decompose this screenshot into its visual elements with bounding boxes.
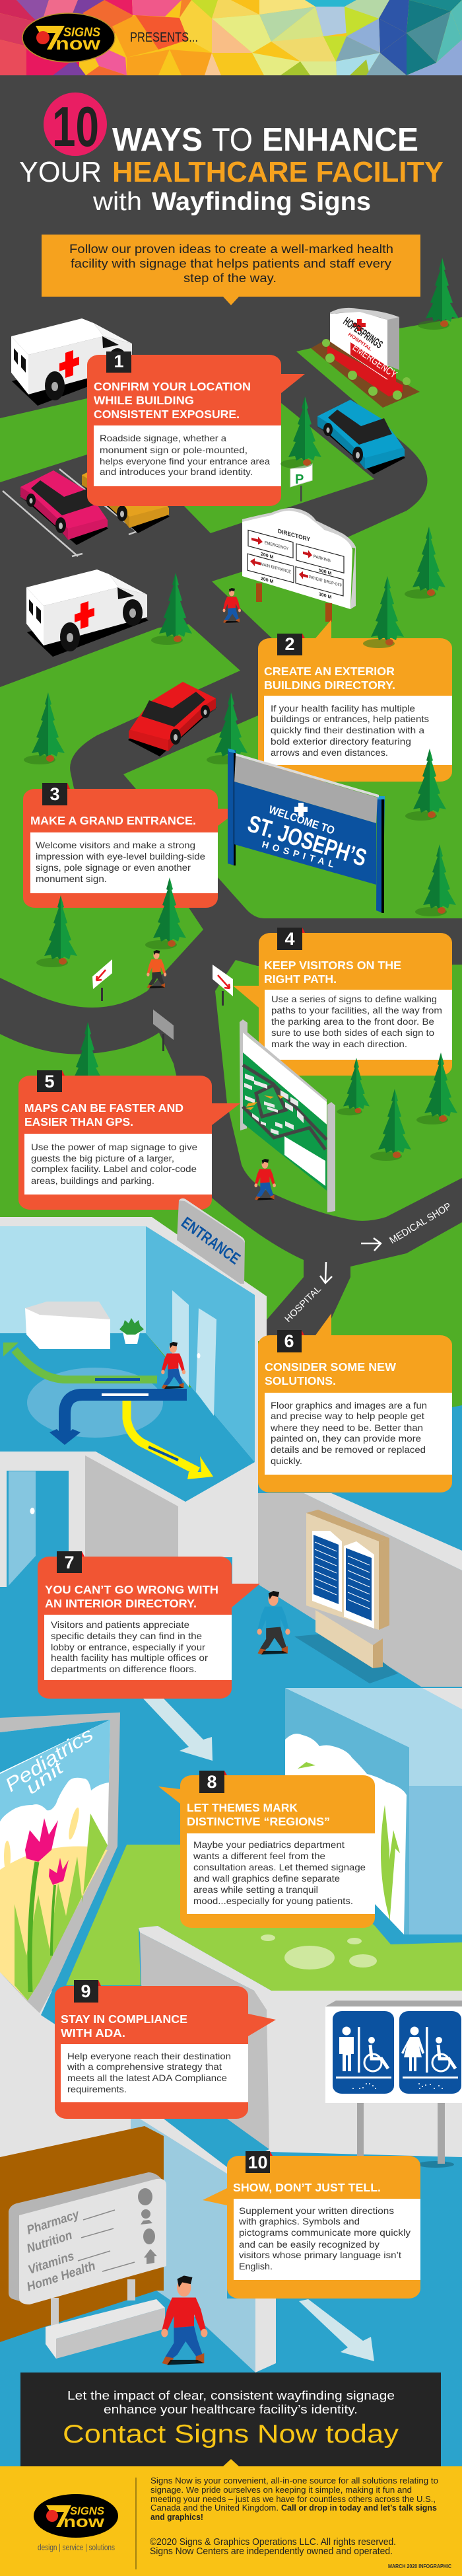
ambulance lower xyxy=(26,570,148,657)
text panel 4: sure to use both sides of each sign to xyxy=(271,1027,434,1038)
map sign xyxy=(240,1019,335,1212)
heading 1: CONSISTENT EXPOSURE. xyxy=(94,408,240,421)
heading 2 xyxy=(264,665,395,692)
pediatrics wall mural: unit xyxy=(22,1757,69,1798)
text panel 2: If your health facility has multiple xyxy=(271,703,415,714)
text panel 4: Use a series of signs to define walking xyxy=(271,994,437,1004)
white planter base xyxy=(46,2299,165,2359)
text panel 3: impression with eye-level building-side xyxy=(36,851,205,862)
text panel 4: mark the way in each direction. xyxy=(271,1039,407,1049)
text panel 7: health facility has multiple offices or xyxy=(51,1652,208,1663)
text panel 10: Supplement your written directions xyxy=(239,2205,394,2216)
text panel 2 xyxy=(264,696,452,765)
number 5: 5 xyxy=(44,1072,55,1091)
person on floor graphics xyxy=(161,1342,185,1389)
callout 5 xyxy=(18,1070,240,1210)
sign: St. Joseph's Hospital: WELCOME TO xyxy=(267,803,336,837)
text panel 8: consultation areas. Let themed signage xyxy=(193,1862,366,1872)
heading 4: RIGHT PATH. xyxy=(264,973,337,986)
road lettering: hospital: HOSPITAL xyxy=(282,1283,323,1324)
heading 7: AN INTERIOR DIRECTORY. xyxy=(45,1597,197,1610)
title: TO xyxy=(212,122,253,158)
text panel 7 xyxy=(44,1615,232,1680)
intro box: facility with signage that helps patients and staff every xyxy=(71,257,391,270)
copyright: Signs Now Centers are independently owned and operated. xyxy=(150,2546,393,2557)
monument sign: Hopesprings Hospital: HOPESPRINGS xyxy=(341,315,385,351)
small direction signs xyxy=(92,959,233,1051)
grass: left lawn xyxy=(0,624,240,1008)
interior blue floor base xyxy=(0,1387,462,2466)
presents label: PRESENTS... xyxy=(130,30,198,45)
exterior directory sign: 200 M xyxy=(261,552,273,560)
text panel 2: quickly find their destination with a xyxy=(271,725,424,735)
text panel 9: requirements. xyxy=(67,2084,127,2094)
heading 1 xyxy=(94,380,251,421)
entrance sign: ENTRANCE xyxy=(178,1214,244,1268)
text panel 8: mood...especially for young patients. xyxy=(193,1895,353,1906)
text panel 7: departments on difference floors. xyxy=(51,1664,197,1674)
text panel 1: monument sign or pole-mounted, xyxy=(100,445,248,455)
intro box xyxy=(42,235,420,305)
about text: meeting your needs – just as we have for countless others across the U.S., xyxy=(150,2494,436,2504)
call to action bar: enhance your healthcare facility’s identity. xyxy=(104,2403,358,2416)
grass: lower left lawn xyxy=(0,1033,304,1387)
number 4 xyxy=(277,928,305,950)
text panel 8: Maybe your pediatrics department xyxy=(193,1839,345,1850)
exterior directory sign xyxy=(242,508,356,622)
call to action bar: Let the impact of clear, consistent wayfinding signage xyxy=(67,2389,395,2402)
exterior directory sign: PATIENT DROP-OFF xyxy=(309,575,342,588)
callout 2 xyxy=(258,620,452,782)
text panel 6: quickly. xyxy=(271,1455,302,1466)
text panel 7: specific details they can find in the xyxy=(51,1631,202,1641)
grass: right side lawn xyxy=(123,317,462,918)
heading 2: BUILDING DIRECTORY. xyxy=(264,679,395,692)
text panel 2: bold exterior directory featuring xyxy=(271,736,411,747)
exterior directory sign: 300 M xyxy=(319,591,331,600)
person walking near directory xyxy=(223,588,241,623)
about text: Canada and the United Kingdom. xyxy=(150,2503,279,2513)
callout 3 xyxy=(23,783,241,908)
number 6 xyxy=(277,1330,304,1352)
pediatrics wall mural: Pediatrics xyxy=(1,1724,97,1796)
text panel 8: areas while setting a tranquil xyxy=(193,1884,318,1895)
trees across the grounds xyxy=(24,258,459,1161)
title: 10 xyxy=(52,96,99,159)
intro box: Follow our proven ideas to create a well-marked health xyxy=(69,242,393,256)
red car xyxy=(128,682,216,756)
number 6: 6 xyxy=(284,1331,294,1351)
corridor right wall xyxy=(258,1493,462,1687)
title: WAYS xyxy=(112,122,203,158)
monument sign: Hopesprings Hospital xyxy=(311,308,420,408)
lobby floor xyxy=(0,1333,250,1502)
floor arrow toward callout 8 xyxy=(143,1699,213,1761)
text panel 10: with graphics. Symbols and xyxy=(238,2216,360,2226)
footer logo: SIGNS xyxy=(70,2505,105,2517)
callout 10 xyxy=(203,2151,420,2299)
title: HEALTHCARE FACILITY xyxy=(112,156,444,188)
callout 1 xyxy=(87,351,305,506)
reception desk xyxy=(25,1302,110,1349)
text panel 1: and introduces your brand identity. xyxy=(100,466,253,477)
floor graphic: blue arrow xyxy=(50,1395,187,1445)
heading 9 xyxy=(61,2012,187,2040)
sign: St. Joseph's Hospital: ST. JOSEPH’S xyxy=(245,809,370,871)
road lettering: medical shop: MEDICAL SHOP xyxy=(387,1200,453,1246)
text panel 6: and precise way to help people get xyxy=(271,1411,424,1421)
blue car xyxy=(317,400,405,474)
text panel 9: meets all the latest ADA Compliance xyxy=(67,2073,227,2083)
heading 4: KEEP VISITORS ON THE xyxy=(264,959,401,972)
text panel 5 xyxy=(24,1134,212,1195)
road lettering: hospital xyxy=(282,1262,332,1324)
text panel 10 xyxy=(234,2199,420,2280)
number 7 xyxy=(57,1551,84,1573)
heading 1: WHILE BUILDING xyxy=(94,394,194,407)
text panel 8: and wall graphics define separate xyxy=(193,1873,340,1884)
parking sign: P xyxy=(295,472,304,487)
number 1: 1 xyxy=(114,351,124,371)
number 8: 8 xyxy=(207,1772,217,1792)
text panel 9 xyxy=(61,2044,248,2102)
green themed floor xyxy=(63,1845,462,1991)
exterior directory sign: 500 M xyxy=(319,568,331,576)
text panel 10: and can be easily recognized by xyxy=(239,2239,380,2250)
about text: signage. We pride ourselves on keeping it simple, making it fun and xyxy=(150,2485,412,2495)
heading 4 xyxy=(264,959,401,986)
tagline: design | service | solutions xyxy=(38,2542,115,2552)
heading 8: LET THEMES MARK xyxy=(187,1801,298,1814)
title: Wayfinding Signs xyxy=(152,188,371,216)
road and dark background xyxy=(0,75,462,1390)
exterior directory sign: MAIN ENTRANCE xyxy=(261,562,291,575)
text panel 3: signs, pole signage or even another xyxy=(36,862,191,873)
text panel 8: wants a different feel from the xyxy=(193,1851,325,1861)
text panel 4: the parking area to the front door. Be xyxy=(271,1016,434,1027)
corridor walls with door xyxy=(0,1452,258,1607)
heading 6 xyxy=(265,1360,396,1387)
callout 6 xyxy=(258,1313,452,1492)
number 9 xyxy=(74,1980,101,2003)
text panel 2: arrows and even distances. xyxy=(271,747,388,758)
logo: Signs Now: SIGNS xyxy=(63,26,100,40)
exterior directory sign: PARKING xyxy=(314,554,331,564)
intro box: step of the way. xyxy=(183,272,277,285)
heading 5: EASIER THAN GPS. xyxy=(24,1115,133,1128)
text panel 8 xyxy=(187,1833,375,1914)
heading 1: CONFIRM YOUR LOCATION xyxy=(94,380,251,393)
text panel 6: where they need to be. Better than xyxy=(270,1422,423,1433)
heading 9: WITH ADA. xyxy=(61,2026,125,2040)
large walking person xyxy=(161,2275,207,2365)
brown wall with directional sign: Vitamins xyxy=(26,2250,76,2277)
grass: lawn by map sign xyxy=(215,960,462,1221)
text panel 10: pictograms communicate more quickly xyxy=(239,2227,411,2238)
floor graphic: yellow arrow xyxy=(127,1401,213,1479)
title: with xyxy=(92,188,142,216)
number 9: 9 xyxy=(81,1981,91,2001)
number 3: 3 xyxy=(50,784,60,804)
logo: Signs Now: now xyxy=(55,34,101,54)
brown wall with directional sign: Home Health xyxy=(25,2259,97,2295)
text panel 3: monument sign. xyxy=(36,873,107,884)
title: ENHANCE xyxy=(262,122,418,158)
text panel 10: visitors whose primary language isn’t xyxy=(239,2250,401,2260)
parking lines xyxy=(3,469,139,556)
number 2: 2 xyxy=(284,634,295,654)
sign: St. Joseph's Hospital xyxy=(228,749,385,913)
brown wall with directional sign: Pharmacy xyxy=(25,2207,82,2238)
number 10 xyxy=(246,2151,273,2173)
text panel 9: with a comprehensive strategy that xyxy=(67,2061,222,2072)
monument sign: Hopesprings Hospital: HOSPITAL xyxy=(347,332,373,352)
brown wall with directional sign xyxy=(0,2126,166,2342)
text panel 5: areas, buildings and parking. xyxy=(31,1175,154,1186)
text panel 10: English. xyxy=(239,2261,273,2271)
icon: women accessible restroom xyxy=(399,2011,461,2094)
pink car xyxy=(20,470,108,545)
brown wall with directional sign: Nutrition xyxy=(25,2228,74,2256)
text panel 7: Visitors and patients appreciate xyxy=(51,1619,189,1630)
title xyxy=(19,92,444,216)
date note: MARCH 2020 INFOGRAPHIC xyxy=(388,2563,451,2569)
person at directory xyxy=(257,1591,290,1654)
copyright: ©2020 Signs & Graphics Operations LLC. All rights reserved. xyxy=(150,2537,396,2548)
number 8 xyxy=(199,1771,227,1793)
pediatrics wall right panel xyxy=(285,1688,462,1936)
sign: St. Joseph's Hospital: HOSPITAL xyxy=(261,839,336,869)
text panel 6 xyxy=(265,1393,452,1475)
number 5 xyxy=(37,1070,65,1092)
text panel 3 xyxy=(30,832,218,893)
heading 5: MAPS CAN BE FASTER AND xyxy=(24,1101,183,1115)
about text: and graphics! xyxy=(150,2512,203,2522)
heading 6: SOLUTIONS. xyxy=(265,1374,336,1387)
number 4: 4 xyxy=(284,929,295,949)
interior directory board xyxy=(294,1510,398,1683)
number 1 xyxy=(106,351,131,373)
callout 7 xyxy=(38,1551,260,1699)
exterior directory sign: EMERGENCY xyxy=(265,540,288,552)
header: low-poly colour mosaic xyxy=(0,0,462,75)
text panel 9: Help everyone reach their destination xyxy=(67,2051,231,2061)
about text: Signs Now is your convenient, all-in-one source for all solutions relating to xyxy=(150,2476,438,2485)
heading 7 xyxy=(45,1583,218,1610)
heading 8: DISTINCTIVE “REGIONS” xyxy=(187,1815,330,1828)
text panel 5: Use the power of map signage to give xyxy=(31,1142,197,1152)
monument sign: Hopesprings Hospital: EMERGENCY xyxy=(350,342,399,381)
number 3 xyxy=(42,783,70,805)
grass: strip by the parking lot xyxy=(0,398,374,533)
text panel 7: lobby or entrance, especially if your xyxy=(51,1642,205,1652)
about text xyxy=(150,2476,438,2522)
heading 6: CONSIDER SOME NEW xyxy=(265,1360,396,1374)
pediatrics wall mural xyxy=(0,1712,127,2025)
entrance sign xyxy=(177,1198,245,1284)
callout 4 xyxy=(233,928,452,1076)
text panel 6: painted on, they can provide more xyxy=(271,1433,421,1444)
text panel 5: complex facility. Label and color-code xyxy=(31,1163,197,1174)
yellow car xyxy=(81,459,170,533)
ambulance top xyxy=(11,318,133,406)
heading 8 xyxy=(187,1801,330,1828)
text panel 6: Floor graphics and images are a fun xyxy=(271,1400,427,1411)
corridor stripes xyxy=(131,2119,276,2373)
footer logo: now xyxy=(63,2513,104,2531)
parking sign xyxy=(290,464,312,501)
exterior directory sign: 200 M xyxy=(261,576,273,585)
person in orange xyxy=(147,950,166,988)
number 10: 10 xyxy=(248,2153,268,2172)
number 7: 7 xyxy=(64,1553,75,1572)
lower blue floor xyxy=(0,2152,462,2466)
callout 9 xyxy=(55,1980,276,2119)
copyright xyxy=(150,2537,396,2557)
grass: lower right lawn xyxy=(330,1222,462,1407)
text panel 1 xyxy=(94,425,281,486)
ADA restroom sign xyxy=(325,2001,462,2103)
plant xyxy=(119,1318,144,1344)
footer xyxy=(0,2459,462,2576)
lower corridor walls xyxy=(0,1926,462,2180)
text panel 3: Welcome visitors and make a strong xyxy=(36,840,195,850)
title: YOUR xyxy=(19,156,102,188)
logo: Signs Now xyxy=(22,13,115,62)
text panel 6: details and be removed or replaced xyxy=(271,1444,426,1455)
lobby building walls xyxy=(0,1217,267,1493)
footer logo xyxy=(34,2494,118,2538)
text panel 4: paths to your facilities, all the way from xyxy=(271,1005,442,1015)
text panel 1: Roadside signage, whether a xyxy=(100,433,226,443)
heading 2: CREATE AN EXTERIOR xyxy=(264,665,395,678)
floor graphic: green arrow xyxy=(3,1343,157,1380)
about text: Call or drop in today and let’s talk signs xyxy=(281,2503,437,2513)
heading 10: SHOW, DON’T JUST TELL. xyxy=(233,2181,381,2194)
ADA sign poles xyxy=(357,2103,454,2168)
heading 5 xyxy=(24,1101,183,1128)
call to action bar: Contact Signs Now today xyxy=(63,2420,399,2448)
text panel 1: helps everyone find your entrance area xyxy=(100,456,270,466)
icon: men accessible restroom xyxy=(333,2011,394,2094)
exterior directory sign: DIRECTORY xyxy=(278,528,310,543)
heading 3: MAKE A GRAND ENTRANCE. xyxy=(30,814,196,827)
floor circle xyxy=(27,1368,163,1438)
person by map sign xyxy=(254,1159,276,1200)
floor arrow bottom xyxy=(299,2299,374,2361)
road lettering: medical shop xyxy=(361,1200,453,1251)
call to action bar xyxy=(20,2373,441,2466)
text panel 2: buildings or entrances, help patients xyxy=(271,714,429,724)
text panel 4 xyxy=(265,990,452,1060)
callout 8 xyxy=(158,1771,375,1928)
heading 7: YOU CAN’T GO WRONG WITH xyxy=(45,1583,218,1596)
number 2 xyxy=(277,634,305,655)
text panel 5: guests the big picture of a larger, xyxy=(31,1153,174,1163)
heading 9: STAY IN COMPLIANCE xyxy=(61,2012,187,2026)
